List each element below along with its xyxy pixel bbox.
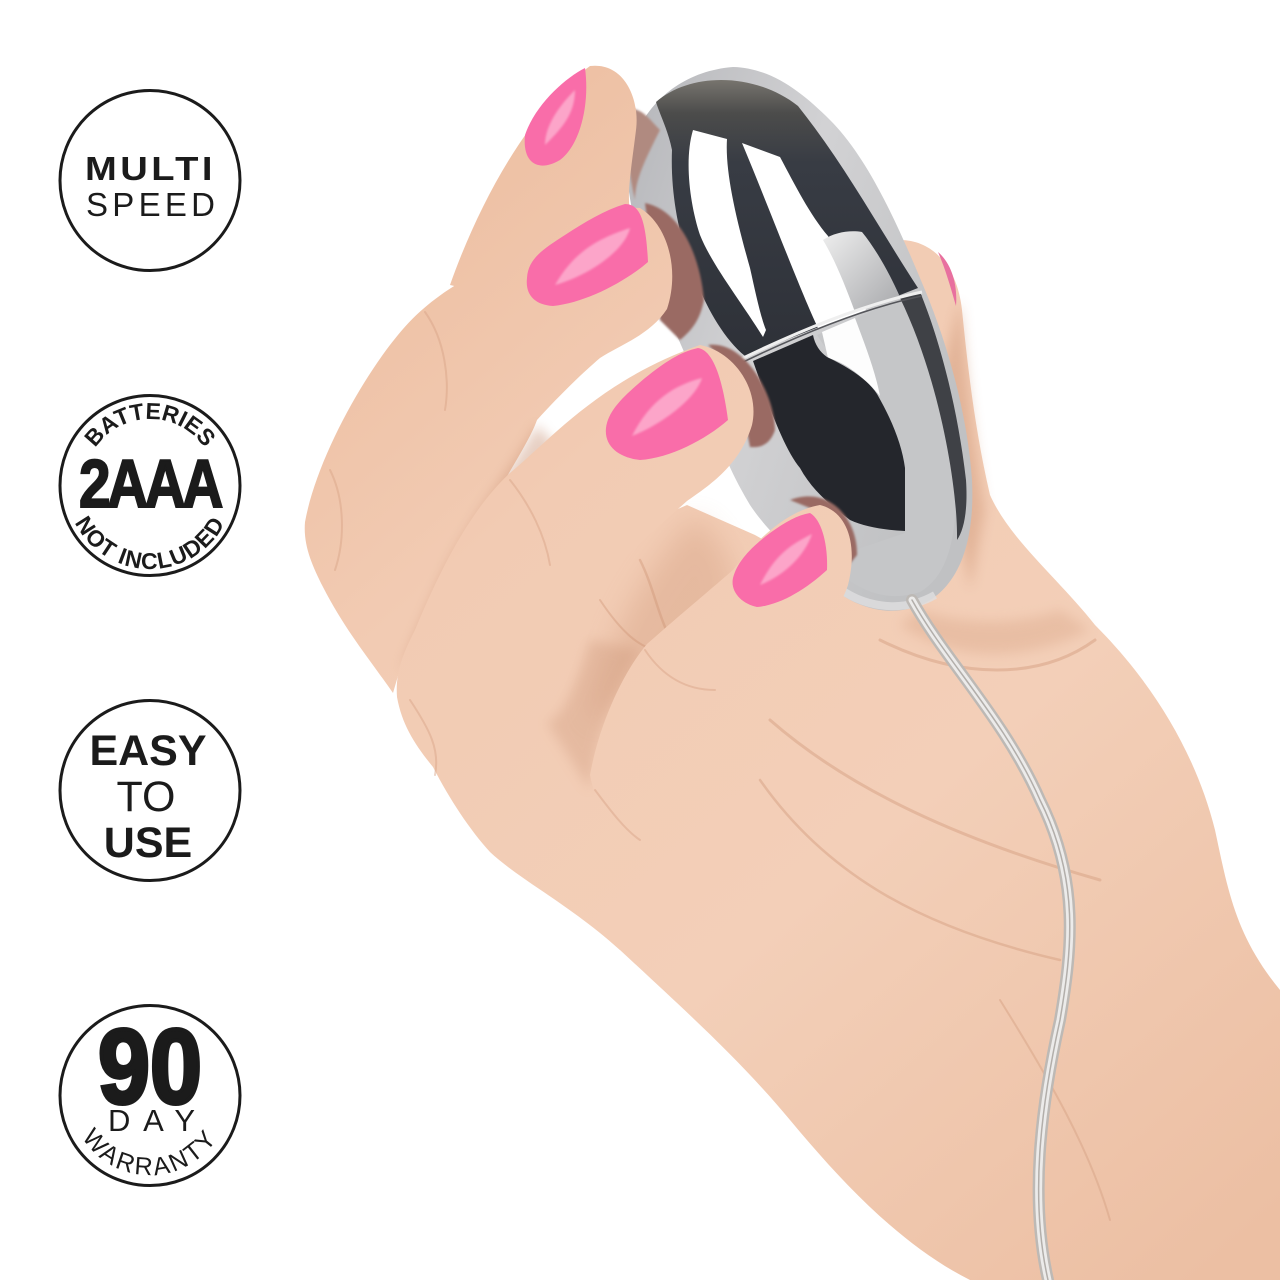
lower dark reflection [753, 335, 905, 531]
badge: 2 AAA batteries: NOT INCLUDED [75, 516, 222, 570]
shadow beside finger 4 [547, 640, 640, 790]
knuckle creases [330, 312, 715, 840]
badge: easy to use [60, 700, 240, 880]
badge: easy to use: TO [117, 773, 175, 821]
finger 2 [305, 208, 672, 693]
palm shadows [590, 520, 735, 720]
finger reflections on egg [626, 109, 857, 570]
finger 3 [397, 345, 753, 950]
badge: 2 AAA batteries: BATTERIES [84, 403, 214, 447]
palm creases [600, 560, 1110, 1220]
white streak right [742, 143, 866, 328]
icon: silver egg [628, 67, 972, 611]
lower silver [817, 297, 956, 596]
thumb shadow near egg [935, 300, 985, 590]
nail 4 [733, 513, 827, 607]
nail 1 [525, 68, 586, 166]
badge: multi speed: SPEED [86, 186, 215, 223]
badge: 90 day warranty: 90 [98, 1008, 202, 1126]
badge: easy to use: USE [104, 819, 192, 867]
badge: 2 AAA batteries: 2AAA [79, 446, 222, 522]
white streak left [689, 130, 766, 337]
finger 1 [450, 66, 640, 310]
thumb nail edge [938, 252, 956, 306]
silver patch [823, 231, 900, 312]
finger 4 [590, 505, 852, 851]
white under seam [822, 318, 880, 396]
badge: 90 day warranty: WARRANTY [84, 1126, 212, 1176]
badge: 2 AAA batteries [58, 394, 242, 577]
nail highlights [545, 90, 812, 585]
badge: 90 day warranty: DAY [108, 1103, 195, 1138]
photo: hand holding silver egg [305, 66, 1280, 1280]
nail 2 [527, 204, 648, 306]
egg body [628, 67, 972, 611]
bottom rim [835, 585, 935, 606]
upper dark reflection [656, 80, 918, 356]
badge: multi speed: MULTI [85, 150, 216, 187]
cable [912, 600, 1070, 1280]
right dark band [900, 292, 967, 540]
badge: multi speed [60, 90, 240, 270]
egg seam [735, 292, 922, 362]
badge: easy to use: EASY [89, 727, 207, 775]
badge: 90 day warranty [58, 1004, 242, 1187]
shadow between fingers [400, 425, 560, 670]
nail 3 [606, 348, 728, 460]
palm and wrist [490, 240, 1280, 1280]
